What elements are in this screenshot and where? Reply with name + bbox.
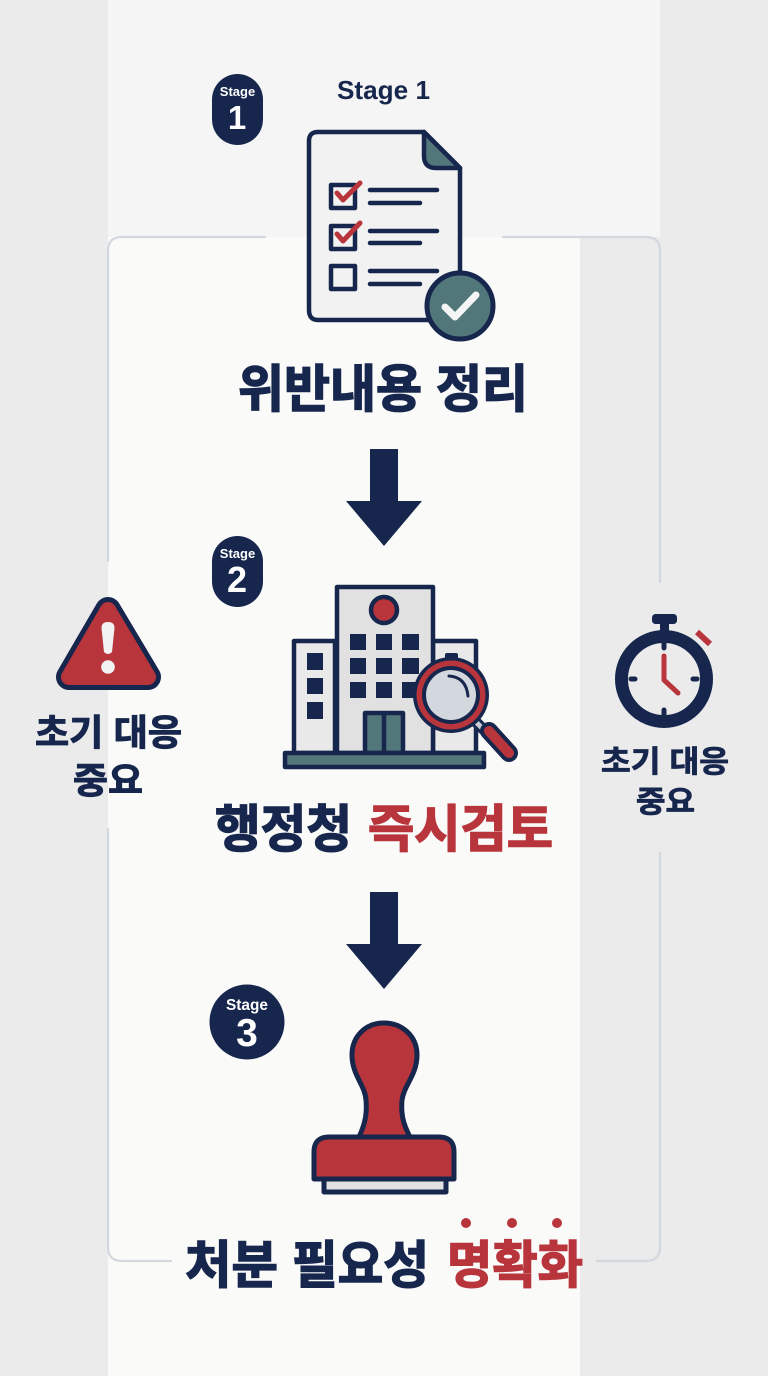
arrow: stage 1 to 2 <box>346 449 422 546</box>
badge: stage 2 <box>212 536 263 607</box>
callout text: right: 중요 <box>636 786 695 819</box>
callout text: left: 중요 <box>73 760 143 801</box>
top heading: Stage 1: Stage 1 <box>337 75 430 105</box>
icon: government building with magnifier <box>285 587 509 767</box>
icon: warning triangle <box>69 610 148 677</box>
title: stage 1: 위반내용 정리 <box>238 361 528 418</box>
badge: stage 2: Stage <box>220 546 255 561</box>
icon: checklist document <box>309 132 493 339</box>
icon: stopwatch <box>622 614 710 722</box>
callout text: left: 초기 대응 <box>35 712 182 753</box>
callout text: right <box>601 746 729 819</box>
badge: stage 3: 3 <box>236 1012 258 1055</box>
emphasis dots <box>461 1218 562 1228</box>
badge: stage 3 <box>210 984 284 1060</box>
badge: stage 3: Stage <box>226 997 268 1014</box>
frame outline <box>108 237 660 1261</box>
title: stage 3 <box>185 1237 583 1294</box>
badge: stage 1: Stage <box>220 84 255 99</box>
title: stage 2: 즉시검토 <box>368 801 553 858</box>
badge: stage 2: 2 <box>227 559 247 600</box>
title: stage 2: 행정청 <box>215 801 352 858</box>
title: stage 3: 필요성 <box>292 1237 429 1294</box>
title: stage 3: 처분 <box>185 1237 278 1294</box>
title: stage 3: 명확화 <box>447 1237 583 1294</box>
badge: stage 1 <box>212 74 263 145</box>
badge: stage 1: 1 <box>228 99 246 136</box>
arrow: stage 2 to 3 <box>346 892 422 989</box>
title: stage 2 <box>215 801 553 858</box>
callout text: left <box>35 712 182 801</box>
callout text: right: 초기 대응 <box>601 746 729 779</box>
icon: rubber stamp <box>314 1023 454 1192</box>
